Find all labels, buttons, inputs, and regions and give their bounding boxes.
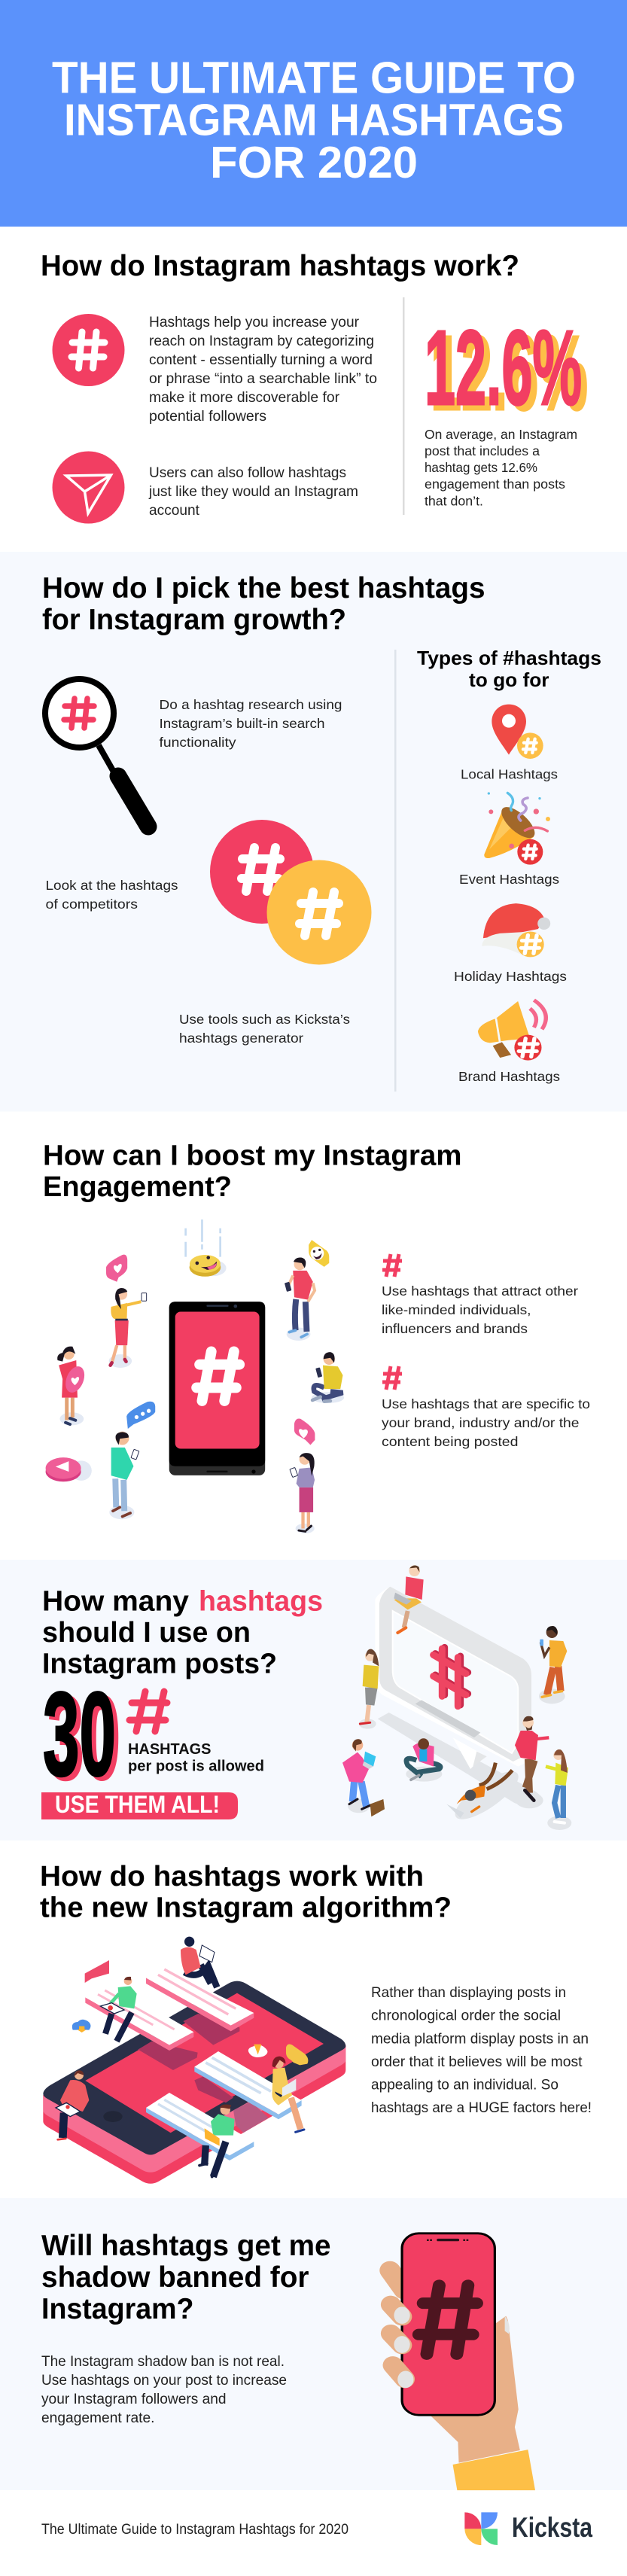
text: brand specific: your brand, industry and/or the xyxy=(382,1415,580,1430)
icon: emoji bubble xyxy=(309,1240,329,1267)
heading: pick the best hashtags xyxy=(42,572,485,636)
heading: new algorithm: How do hashtags work with xyxy=(40,1861,424,1892)
text: engagement statistic: post that includes a xyxy=(425,443,540,458)
illustration: speech bubble with people xyxy=(342,1565,571,1830)
text: hashtag research: Instagram’s built-in search xyxy=(160,716,325,731)
label: hashtags per post xyxy=(128,1741,264,1775)
heading: pick the best hashtags: for Instagram growth? xyxy=(42,604,346,636)
statistic: 30 hashtags: 30 xyxy=(43,1668,116,1801)
text: users can follow: just like they would an Instagram xyxy=(148,484,358,500)
figure: woman holding heart xyxy=(57,1347,88,1425)
icon: falling emoji coin xyxy=(186,1219,227,1277)
logo: Kicksta xyxy=(464,2512,592,2545)
title: INSTAGRAM HASHTAGS xyxy=(64,95,564,145)
text: hashtag research: functionality xyxy=(160,735,236,750)
icon: white cloud xyxy=(248,2045,267,2057)
figure: green man with tablet xyxy=(100,1977,137,2042)
icon: party popper xyxy=(484,792,550,865)
label: holiday hashtags: Holiday Hashtags xyxy=(454,969,567,984)
icon: heart pin left xyxy=(106,1255,127,1282)
phone platform xyxy=(43,1981,345,2184)
wordmark: Kicksta xyxy=(512,2512,592,2543)
card: left xyxy=(85,1984,193,2051)
text: rather than displaying: media platform display posts in an xyxy=(371,2031,589,2048)
heading: types of hashtags xyxy=(417,647,601,691)
heading: shadow ban xyxy=(41,2230,331,2325)
text: users can follow: Users can also follow hashtags xyxy=(149,465,346,481)
figure: woman yellow right xyxy=(546,1749,571,1830)
text: engagement statistic: On average, an Instagram xyxy=(425,427,577,442)
text: shadow ban is not real: engagement rate. xyxy=(41,2410,155,2426)
figure: person lying xyxy=(446,1763,525,1827)
panel: shadow ban xyxy=(0,2198,627,2490)
text: hashtags help: Hashtags help you increase your xyxy=(149,315,360,330)
label: hashtags per post: HASHTAGS xyxy=(128,1741,211,1758)
title: THE ULTIMATE GUIDE TO xyxy=(52,53,576,102)
illustration: isometric phone with people xyxy=(43,1937,345,2184)
card shadows xyxy=(138,2014,269,2133)
text: attract like-minded: Use hashtags that attract other xyxy=(382,1283,578,1299)
text: hashtags help: reach on Instagram by categorizing xyxy=(149,333,374,349)
figure: person sitting pink xyxy=(406,1738,442,1782)
text: users can follow: account xyxy=(149,503,200,519)
text: hashtags help: content - essentially turning a word xyxy=(149,352,373,368)
text: rather than displaying: Rather than displaying posts in xyxy=(371,1985,566,2001)
figure: man with beard xyxy=(515,1716,549,1808)
footer xyxy=(41,2512,592,2545)
heading: how many hashtags: should I use on xyxy=(42,1617,251,1649)
heading: boost engagement: Engagement? xyxy=(43,1171,232,1203)
icon: santa hat xyxy=(482,903,550,957)
text: footer title: The Ultimate Guide to Instagram Hashtags for 2020 xyxy=(41,2522,349,2538)
card: right xyxy=(194,2051,302,2119)
button: use them all: USE THEM ALL! xyxy=(55,1791,220,1818)
icon: floating speech red xyxy=(85,1960,109,1983)
figure: man red shirt xyxy=(285,1258,315,1341)
panel: how hashtags work xyxy=(41,250,588,524)
heading: new algorithm: the new Instagram algorithm? xyxy=(40,1892,452,1924)
text: hashtag research: Do a hashtag research using xyxy=(160,697,342,712)
icon: send arrow circle xyxy=(53,452,125,524)
panel: title banner xyxy=(0,0,627,227)
text: hashtags help: potential followers xyxy=(149,409,266,425)
fingers xyxy=(391,2304,405,2379)
text: rather than displaying: chronological order the social xyxy=(371,2008,561,2023)
text: rather than displaying: appealing to an individual. So xyxy=(371,2078,559,2093)
text: shadow ban is not real: your Instagram followers and xyxy=(41,2392,226,2407)
text: brand specific xyxy=(382,1396,590,1449)
heading: types of hashtags: to go for xyxy=(469,668,549,691)
card: bottom xyxy=(146,2093,254,2160)
icon: small hashtag xyxy=(382,1254,402,1277)
heading: how many hashtags: How many xyxy=(42,1585,189,1617)
phone xyxy=(402,2233,495,2415)
heading: how do Instagram hashtags work: How do Instagram hashtags work? xyxy=(41,250,519,282)
figure: man pink with laptop xyxy=(342,1739,385,1816)
panel: new algorithm xyxy=(40,1861,592,2184)
text: shadow ban is not real xyxy=(41,2354,287,2426)
label: hashtags per post: per post is allowed xyxy=(128,1758,264,1775)
icon: magnifying glass xyxy=(45,679,148,827)
panel: how many hashtags xyxy=(0,1560,627,1841)
heading: how many hashtags: hashtags xyxy=(199,1585,323,1617)
title: FOR 2020 xyxy=(210,138,418,187)
panel: pick the best hashtags xyxy=(0,552,627,1111)
text: engagement statistic: engagement than posts xyxy=(425,477,565,492)
label: brand hashtags: Brand Hashtags xyxy=(458,1069,560,1084)
figure: bottom green man xyxy=(199,2105,235,2177)
figure: top man with laptop xyxy=(181,1937,217,1987)
figure: coral woman with tablet xyxy=(56,2070,89,2139)
heading: types of hashtags: Types of #hashtags xyxy=(417,647,601,669)
hand xyxy=(390,2270,520,2463)
text: hashtag research xyxy=(160,697,342,750)
heading: shadow ban: Will hashtags get me xyxy=(41,2230,331,2262)
text: hashtags help xyxy=(149,315,377,425)
phone xyxy=(169,1302,265,1475)
icon: play coin xyxy=(46,1457,92,1481)
heading: pick the best hashtags: How do I pick the best hashtags xyxy=(42,572,485,604)
icon: megaphone xyxy=(478,1000,546,1061)
text: shadow ban is not real: The Instagram shadow ban is not real. xyxy=(41,2354,285,2370)
icon: yellow speech xyxy=(286,2045,308,2065)
card: top xyxy=(146,1968,254,2031)
figure: woman purple xyxy=(290,1453,315,1533)
label: event hashtags: Event Hashtags xyxy=(459,872,559,887)
text: engagement statistic xyxy=(425,427,577,509)
statistic: 30 hashtags xyxy=(43,1668,264,1804)
icon: hashtag circle xyxy=(53,314,125,386)
text: attract like-minded: like-minded individuals, xyxy=(382,1302,531,1317)
nails xyxy=(394,2307,413,2388)
text: attract like-minded xyxy=(382,1283,578,1336)
text: shadow ban is not real: Use hashtags on your post to increase xyxy=(41,2373,287,2389)
text: rather than displaying: order that it believes will be most xyxy=(371,2054,583,2070)
hashtag 3d xyxy=(434,1647,468,1707)
heading: how many hashtags: Instagram posts? xyxy=(42,1649,277,1680)
text: competitors: of competitors xyxy=(45,897,138,912)
text: tools xyxy=(179,1012,350,1046)
icon: small hashtag xyxy=(382,1366,402,1390)
icon: pinwheel xyxy=(464,2512,498,2545)
icon: heart pin right xyxy=(294,1419,315,1445)
text: engagement statistic: that don’t. xyxy=(425,494,483,509)
icon: location pin xyxy=(492,705,543,759)
text: brand specific: content being posted xyxy=(382,1434,518,1449)
text: competitors: Look at the hashtags xyxy=(45,878,178,893)
statistic: 30 hashtags: 30 xyxy=(47,1672,120,1804)
heading: new algorithm xyxy=(40,1861,452,1924)
icon: large hashtag xyxy=(129,1691,167,1731)
text: hashtags help: or phrase “into a searchable link” to xyxy=(149,371,377,387)
figure: man on top with laptop xyxy=(394,1565,424,1633)
text: rather than displaying: hashtags are a HUGE factors here! xyxy=(371,2100,592,2116)
tip: like-minded xyxy=(382,1254,578,1336)
tip: specific xyxy=(382,1366,590,1449)
label: local hashtags: Local Hashtags xyxy=(461,766,558,781)
figure: man green shirt xyxy=(109,1432,139,1519)
text: brand specific: Use hashtags that are specific to xyxy=(382,1396,590,1411)
figure: man sitting xyxy=(312,1352,344,1403)
text: tools: Use tools such as Kicksta’s xyxy=(179,1012,350,1027)
illustration: phone with people xyxy=(46,1219,344,1533)
icon: overlapping hashtag circles xyxy=(210,820,372,965)
heading: shadow ban: Instagram? xyxy=(41,2293,194,2325)
ground shadow xyxy=(378,1713,542,1806)
heading: boost engagement xyxy=(43,1140,461,1203)
sleeve xyxy=(453,2450,535,2490)
heading: boost engagement: How can I boost my Instagram xyxy=(43,1140,461,1171)
text: competitors xyxy=(45,878,178,912)
text: engagement statistic: hashtag gets 12.6% xyxy=(425,460,537,475)
figure: man orange xyxy=(539,1626,567,1704)
illustration: hand holding phone xyxy=(390,2233,535,2490)
text: tools: hashtags generator xyxy=(179,1031,303,1046)
text: attract like-minded: influencers and brands xyxy=(382,1321,528,1336)
text: rather than displaying xyxy=(371,1985,592,2116)
icon: blue cloud xyxy=(72,2020,90,2032)
panel: boost engagement xyxy=(43,1140,590,1533)
heading: shadow ban: shadow banned for xyxy=(41,2261,309,2294)
heading: how many hashtags xyxy=(42,1585,323,1680)
icon: speech bubble dots xyxy=(126,1402,155,1429)
figure: yellow woman with laptop xyxy=(272,2057,304,2132)
sidebar: types of hashtags xyxy=(417,647,601,1084)
text: hashtags help: make it more discoverable for xyxy=(149,390,340,406)
title xyxy=(52,53,576,187)
bubble xyxy=(375,1587,531,1769)
figure: woman with selfie phone xyxy=(109,1288,147,1368)
figure: woman yellow top xyxy=(359,1649,379,1729)
text: users can follow xyxy=(148,465,358,519)
